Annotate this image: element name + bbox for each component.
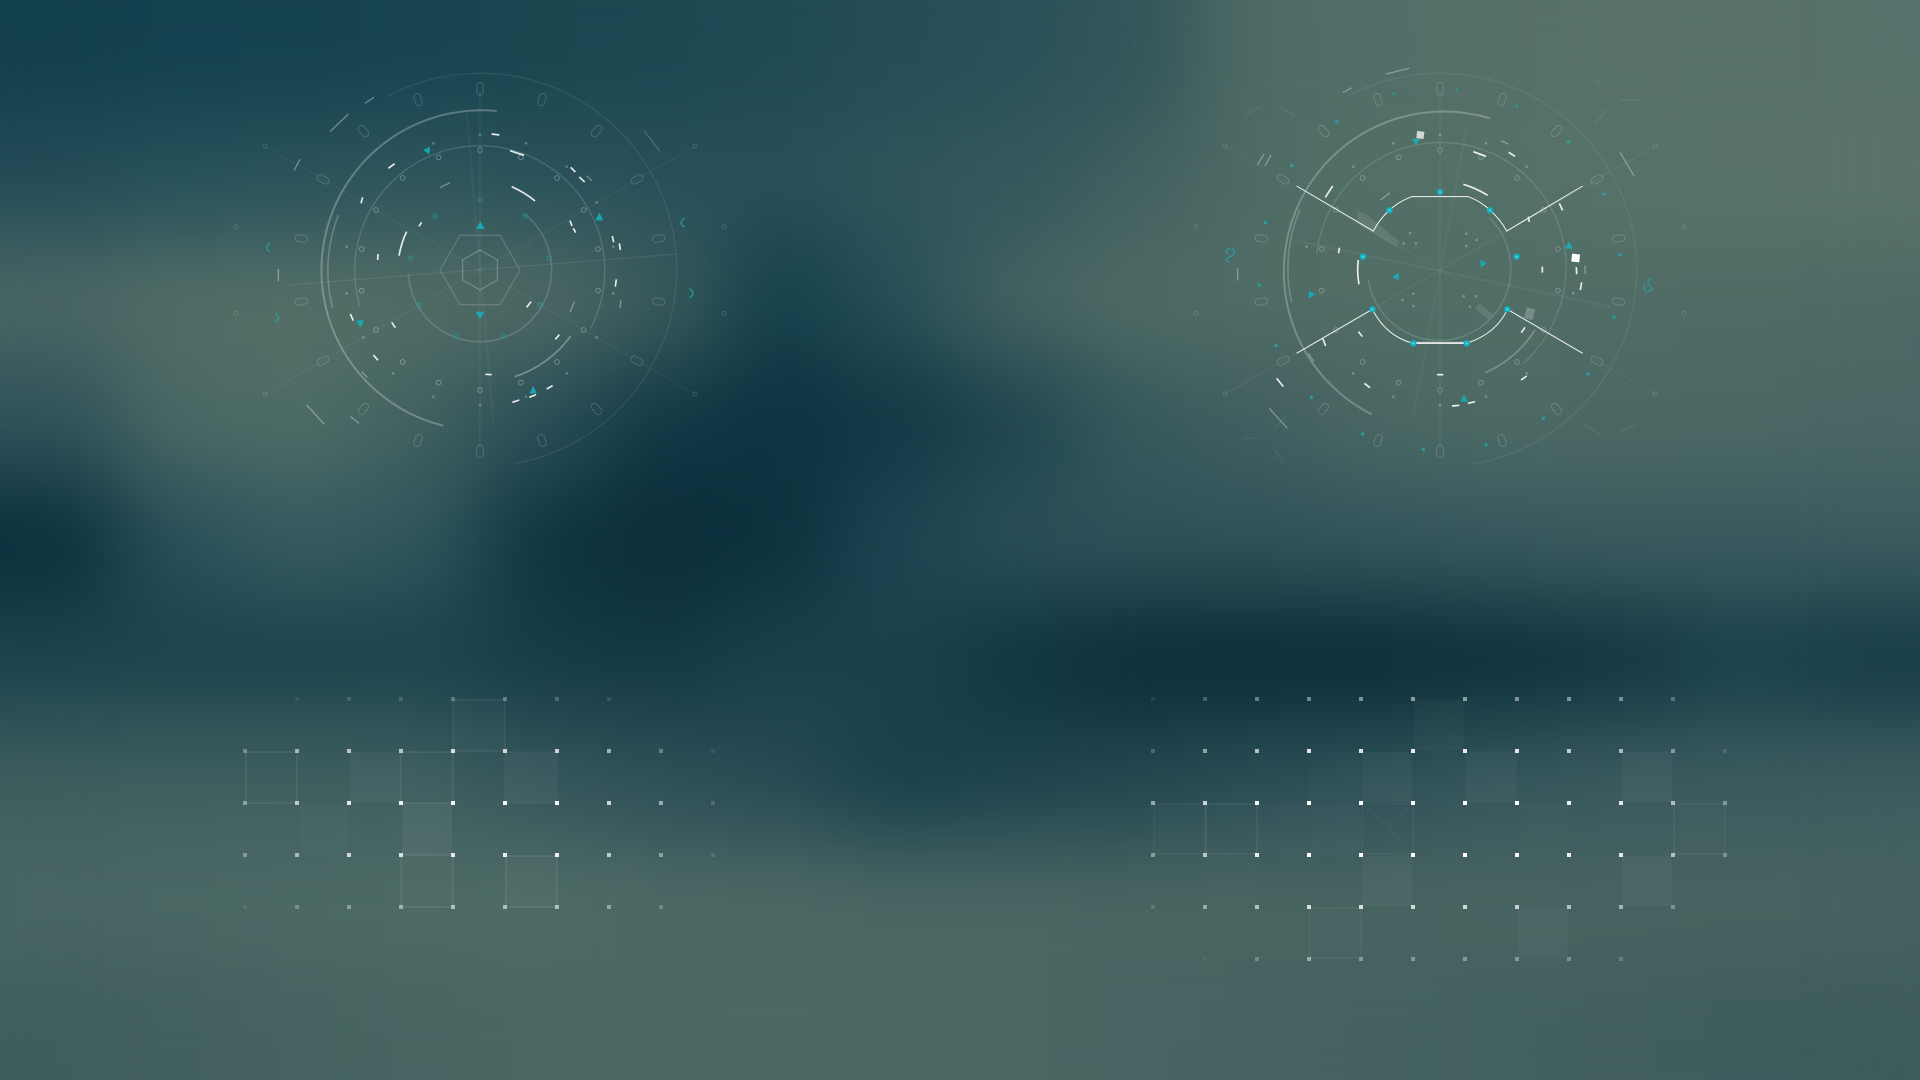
right radial HUD dial with targeting frame: [1194, 68, 1686, 464]
spokes: [265, 90, 695, 450]
left dot grid with highlighted cells: [243, 697, 715, 909]
rings and arcs: [1284, 73, 1637, 464]
rings and arcs: [321, 73, 677, 464]
left radial HUD dial: [234, 73, 726, 464]
cyan crescents: [267, 218, 693, 322]
cyan triangles: [1309, 139, 1573, 402]
radial capsules: [1255, 82, 1625, 458]
cyan triangles: [356, 147, 603, 393]
right dot grid with highlighted cells: [1151, 697, 1727, 961]
cyan S-shaped hooks: [1226, 249, 1652, 292]
small ring nodes: [1194, 144, 1686, 396]
left grid dots: [243, 697, 715, 909]
right grid dots: [1151, 697, 1727, 961]
grey tick dashes: [278, 97, 660, 424]
faint teal ring markers: [409, 198, 551, 338]
grey tick dashes: [1238, 68, 1634, 428]
left grid cells: [246, 700, 660, 907]
outer cyan dot ring: [1258, 88, 1622, 451]
faded outer hatched capsules: [1242, 78, 1638, 462]
white squares: [1416, 131, 1580, 262]
radial capsules: [295, 82, 665, 458]
white tick dashes: [350, 134, 620, 402]
cyan frame nodes: [1361, 190, 1519, 345]
tiny grey dots: [345, 133, 615, 406]
tiny grey dots: [1305, 133, 1575, 406]
centre hexagons: [440, 235, 520, 305]
spokes: [1225, 90, 1655, 450]
small ring nodes: [234, 144, 726, 396]
translucent grey wedges and chips: [1357, 211, 1535, 320]
white targeting frame: [1297, 186, 1583, 353]
white tick dashes: [1277, 152, 1582, 406]
right grid cells: [1154, 700, 1725, 958]
